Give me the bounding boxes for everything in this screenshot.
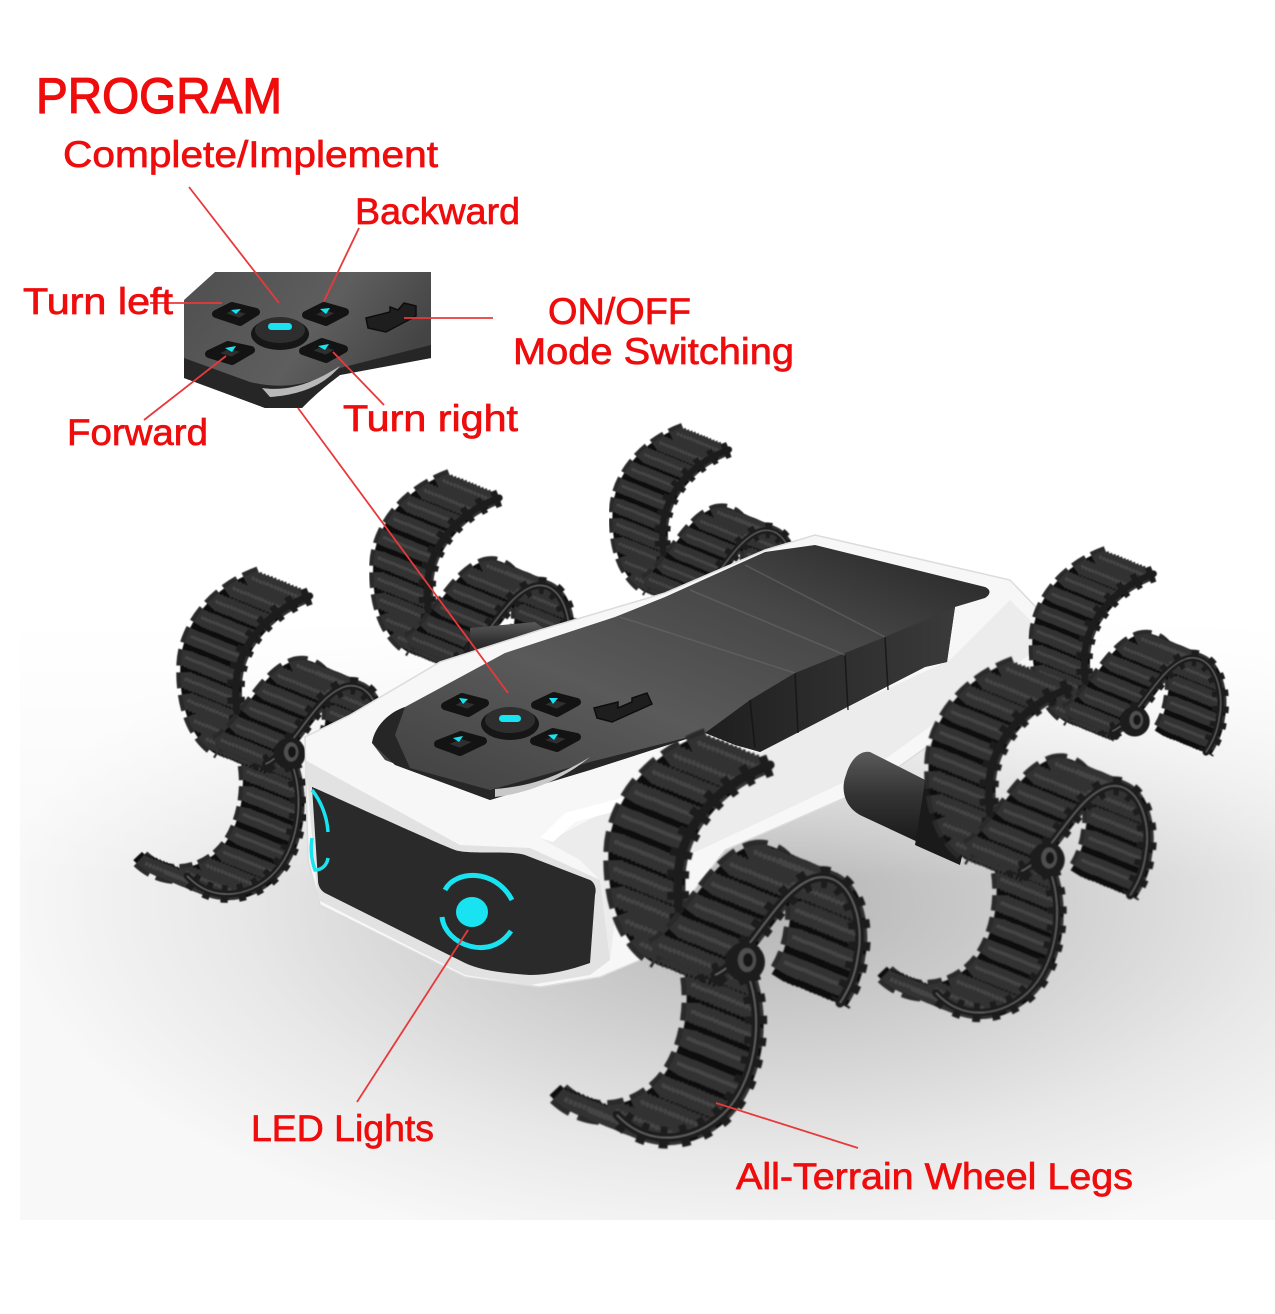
inset shine — [262, 366, 340, 397]
label: All-Terrain Wheel Legs: All-Terrain Wheel Legs — [736, 1156, 1133, 1197]
label: Complete/Implement: Complete/Implement — [63, 134, 439, 175]
label: Mode Switching: Mode Switching — [513, 331, 794, 372]
leader lines — [144, 187, 858, 1148]
panel side wall — [705, 607, 955, 752]
button: forward — [438, 735, 483, 752]
button: turn right — [534, 732, 577, 748]
side white highlight — [540, 793, 650, 842]
robot body shell — [305, 535, 1055, 987]
far right wheel leg — [1038, 555, 1221, 752]
label: LED Lights: LED Lights — [251, 1108, 434, 1149]
panel top seams — [620, 565, 885, 673]
panel seams — [750, 637, 888, 748]
back right wheel leg — [618, 432, 793, 621]
right front wheel leg — [882, 667, 1147, 1013]
side shading — [540, 600, 1050, 960]
label: Turn right: Turn right — [343, 398, 519, 439]
button: centre — [481, 707, 539, 740]
inset button: turn left — [216, 306, 256, 322]
front wheel leg — [555, 740, 860, 1138]
label: Turn left: Turn left — [23, 281, 174, 322]
top dark panel — [372, 545, 990, 800]
rear axle — [470, 622, 560, 662]
inset button: forward — [209, 345, 251, 361]
title: PROGRAM: PROGRAM — [36, 68, 282, 124]
control buttons on robot — [438, 693, 652, 752]
button: turn left — [535, 696, 577, 713]
inset button: backward — [306, 306, 345, 322]
robot illustration — [138, 432, 1221, 1138]
background shading — [20, 618, 1275, 1220]
control plate lip — [372, 707, 705, 800]
inset mode switch — [366, 303, 416, 332]
inset button: centre — [251, 317, 309, 350]
right axle — [844, 752, 975, 865]
label: Forward: Forward — [67, 412, 208, 453]
front bezel — [305, 760, 610, 985]
inset lip — [184, 345, 431, 408]
control panel inset — [184, 272, 431, 408]
back left wheel leg — [138, 576, 381, 894]
control plate shine — [495, 757, 590, 797]
label: ON/OFF: ON/OFF — [548, 291, 691, 332]
button: backward — [445, 697, 485, 713]
front face — [312, 787, 596, 975]
label: Backward: Backward — [355, 191, 520, 232]
inset button: turn right — [303, 342, 344, 359]
mode switch — [594, 693, 652, 722]
back middle wheel leg — [379, 478, 569, 684]
LED lights — [311, 790, 512, 948]
